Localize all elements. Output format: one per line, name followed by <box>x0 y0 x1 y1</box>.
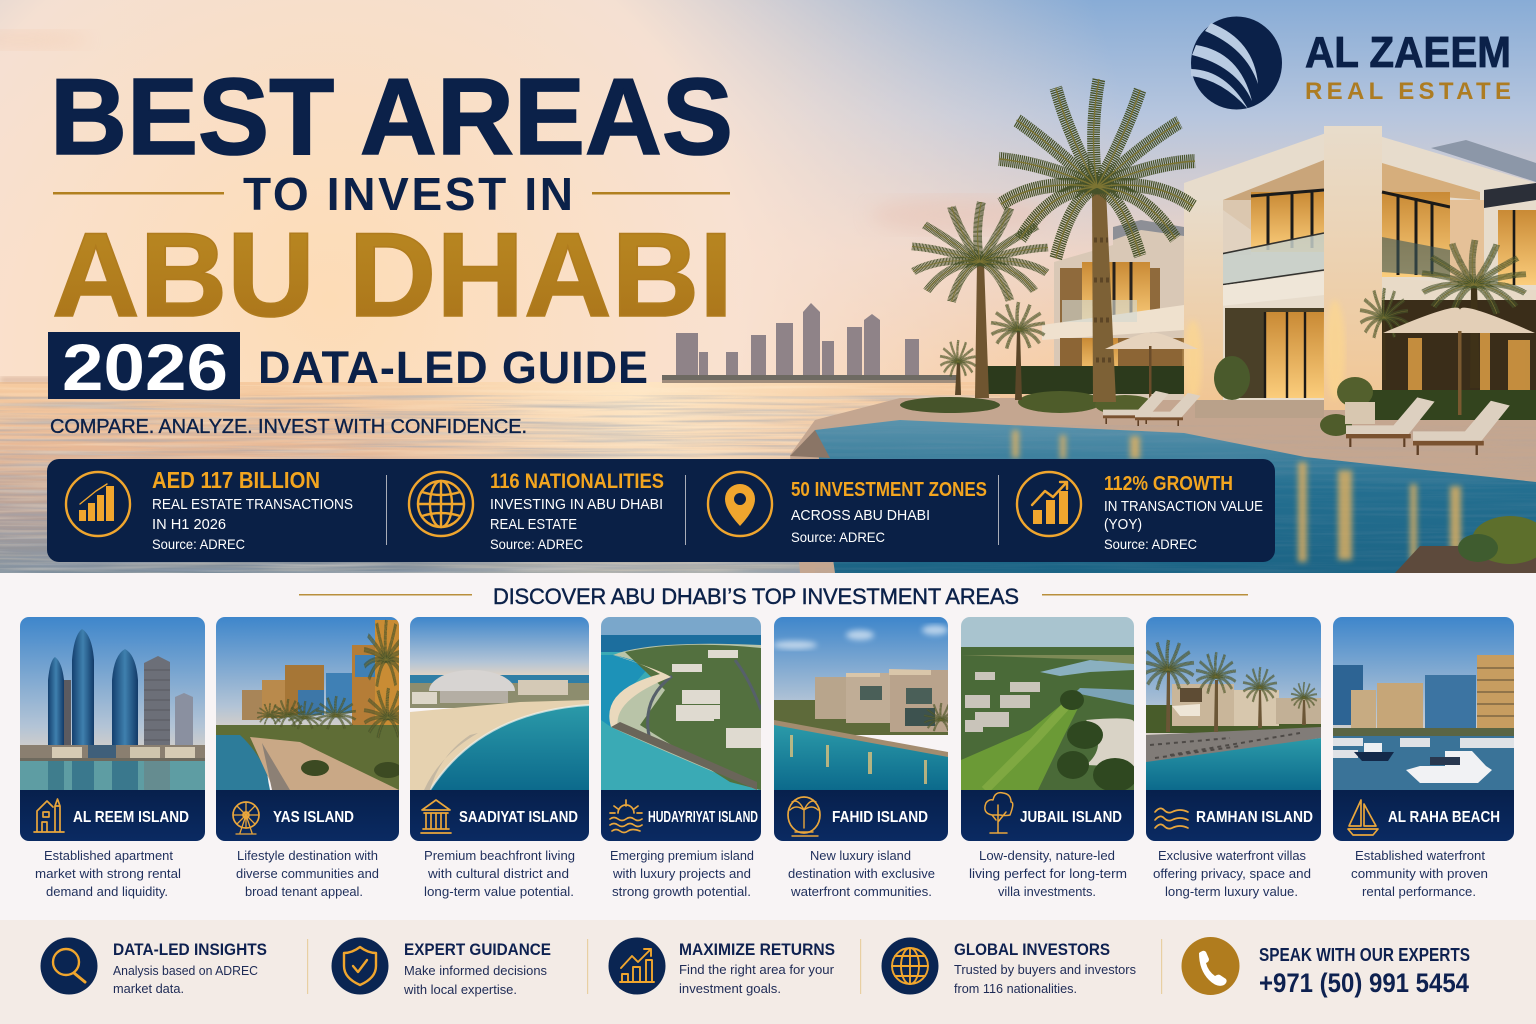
panel: key statistics <box>47 459 1275 562</box>
benefit: global investors: GLOBAL INVESTORS <box>954 940 1110 959</box>
card: Saadiyat Island <box>410 617 589 899</box>
icon: waves <box>1155 808 1188 829</box>
icon: magnifier <box>40 938 98 994</box>
title line: best areas: BEST AREAS <box>50 56 733 178</box>
card description: long-term luxury value. <box>1165 884 1298 899</box>
stat: AED 117 billion: AED 117 BILLION <box>152 467 320 493</box>
label bar <box>1333 790 1514 841</box>
icon: palm island <box>788 797 820 836</box>
card description: Established apartment <box>44 848 173 863</box>
contact call to action <box>1182 937 1470 998</box>
sea <box>0 376 1031 573</box>
photo: Saadiyat beach and dome <box>410 617 589 790</box>
benefit: global investors: from 116 nationalities. <box>954 981 1077 996</box>
card description: diverse communities and <box>236 866 379 881</box>
icon: growth chart <box>1017 472 1081 536</box>
title block <box>48 56 733 438</box>
title line: abu dhabi: ABU DHABI <box>52 208 733 342</box>
benefit: data-led insights: DATA-LED INSIGHTS <box>113 940 267 959</box>
card description: offering privacy, space and <box>1153 866 1311 881</box>
card description: Established waterfront <box>1355 848 1485 863</box>
card description: Lifestyle destination with <box>237 848 378 863</box>
icon: ferris wheel <box>233 802 259 834</box>
card description: with cultural district and <box>427 866 569 881</box>
card description: destination with exclusive <box>788 866 935 881</box>
benefit: expert guidance <box>332 938 551 997</box>
label bar <box>216 790 399 841</box>
card description <box>424 848 575 899</box>
year badge: 2026 <box>62 330 228 404</box>
icon: growth bars <box>608 938 666 994</box>
sky <box>0 0 1536 390</box>
card description: with luxury projects and <box>612 866 751 881</box>
benefit: maximize returns: investment goals. <box>679 981 781 996</box>
benefit: global investors: Trusted by buyers and investors <box>954 962 1136 977</box>
company name: AL ZAEEM <box>1305 28 1511 77</box>
photo: Al Reem towers <box>20 617 205 791</box>
card title: HUDAYRIYAT ISLAND <box>648 809 758 826</box>
stat: 50 investment zones: 50 INVESTMENT ZONES <box>791 479 987 501</box>
main villa <box>1184 126 1536 418</box>
benefit: data-led insights <box>40 938 267 996</box>
card description: Premium beachfront living <box>424 848 575 863</box>
card description: community with proven <box>1351 866 1488 881</box>
icon: rising bars <box>66 472 130 536</box>
icon: museum columns <box>421 800 451 833</box>
card title: AL REEM ISLAND <box>73 809 189 826</box>
footer band <box>0 920 1536 1024</box>
card title: AL RAHA BEACH <box>1388 809 1500 826</box>
card description: rental performance. <box>1362 884 1476 899</box>
card: Ramhan Island <box>1142 617 1321 899</box>
tagline: COMPARE. ANALYZE. INVEST WITH CONFIDENCE. <box>50 416 527 438</box>
card title: JUBAIL ISLAND <box>1020 809 1122 826</box>
card description: villa investments. <box>998 884 1096 899</box>
card description <box>236 848 379 899</box>
stat: 50 investment zones: Source: ADREC <box>791 529 885 545</box>
phone number: +971 (50) 991 5454 <box>1259 968 1469 998</box>
parasols <box>1105 308 1535 415</box>
label bar <box>601 790 761 841</box>
stat: AED 117 billion: REAL ESTATE TRANSACTIONS <box>152 496 353 513</box>
stat: 112% growth <box>1017 472 1263 552</box>
sun loungers <box>1103 391 1510 455</box>
logo mark <box>1191 16 1282 110</box>
contact heading: SPEAK WITH OUR EXPERTS <box>1259 945 1470 965</box>
stat: 116 nationalities: 116 NATIONALITIES <box>490 470 664 493</box>
card description: strong growth potential. <box>612 884 751 899</box>
card description <box>969 848 1127 899</box>
photo: Yas promenade <box>216 617 412 790</box>
section heading: DISCOVER ABU DHABI’S TOP INVESTMENT AREAS <box>493 584 1019 609</box>
title line: to invest in: TO INVEST IN <box>243 168 573 220</box>
card description: waterfront communities. <box>790 884 932 899</box>
stat: 112% growth: (YOY) <box>1104 517 1142 533</box>
hedges and planting <box>900 356 1536 436</box>
card description: living perfect for long-term <box>969 866 1127 881</box>
benefit: maximize returns <box>608 938 835 996</box>
stat: 116 nationalities: INVESTING IN ABU DHABI <box>490 496 663 513</box>
card title: FAHID ISLAND <box>832 809 928 826</box>
benefit: expert guidance: EXPERT GUIDANCE <box>404 940 551 959</box>
label bar <box>774 790 948 841</box>
card: Yas Island <box>216 617 412 899</box>
icon: globe <box>409 472 473 536</box>
photo: Fahid waterfront villas <box>773 617 958 790</box>
card description: New luxury island <box>810 848 911 863</box>
benefit: expert guidance: Make informed decisions <box>404 963 547 978</box>
card: Al Raha Beach <box>1333 617 1514 899</box>
card: Al Reem Island <box>20 617 205 899</box>
logo: Al Zaeem Real Estate <box>1191 16 1511 110</box>
card description <box>1153 848 1311 899</box>
benefit: maximize returns: Find the right area for your <box>679 962 835 977</box>
icon: tree <box>985 793 1013 833</box>
label bar <box>1146 790 1321 841</box>
card description: Low-density, nature-led <box>979 848 1115 863</box>
label bar <box>961 790 1134 841</box>
icon: house and tower <box>34 799 64 832</box>
benefit: global investors <box>882 938 1136 996</box>
card description: long-term value potential. <box>424 884 574 899</box>
card title: SAADIYAT ISLAND <box>459 809 578 826</box>
card description <box>35 848 181 899</box>
pool and deck <box>790 398 1536 573</box>
card title: YAS ISLAND <box>273 809 354 826</box>
icon: sailboat <box>1348 800 1378 835</box>
card description: Emerging premium island <box>610 848 754 863</box>
photo: Ramhan palms and rocks <box>1142 617 1321 790</box>
icon: globe <box>882 938 938 994</box>
icon: shield check <box>332 938 388 994</box>
benefit: data-led insights: Analysis based on ADREC <box>113 963 258 978</box>
stat: 50 investment zones <box>708 472 987 545</box>
stat: 50 investment zones: ACROSS ABU DHABI <box>791 507 930 524</box>
benefit: maximize returns: MAXIMIZE RETURNS <box>679 940 835 959</box>
label bar <box>20 790 205 841</box>
card description: broad tenant appeal. <box>245 884 363 899</box>
card: Fahid Island <box>773 617 958 899</box>
photo: Al Raha marina <box>1333 617 1514 790</box>
card description: market with strong rental <box>35 866 181 881</box>
palm trees <box>912 79 1526 402</box>
stat: 112% growth: 112% GROWTH <box>1104 473 1233 495</box>
icon: sun over water <box>610 800 642 832</box>
icon: map pin <box>708 472 772 536</box>
company tagline: REAL ESTATE <box>1305 78 1511 105</box>
stat: 116 nationalities: REAL ESTATE <box>490 516 577 533</box>
stat: 116 nationalities: Source: ADREC <box>490 536 583 552</box>
card description: Exclusive waterfront villas <box>1158 848 1306 863</box>
card description <box>788 848 935 899</box>
photo: Hudayriyat aerial coast <box>601 617 761 792</box>
stat: AED 117 billion: Source: ADREC <box>152 536 245 552</box>
skyline <box>662 303 957 383</box>
benefit: data-led insights: market data. <box>113 981 184 996</box>
subtitle: DATA-LED GUIDE <box>258 342 648 393</box>
label bar <box>410 790 589 841</box>
icon: phone <box>1182 937 1240 995</box>
stat: AED 117 billion: IN H1 2026 <box>152 516 226 533</box>
stat: AED 117 billion <box>66 467 353 552</box>
card: Hudayriyat Island <box>601 617 761 899</box>
stat: 116 nationalities <box>409 470 664 552</box>
card: Jubail Island <box>961 617 1137 899</box>
card description <box>610 848 754 899</box>
hero scene: sunset, sea, skyline and villas <box>0 0 1536 573</box>
card title: RAMHAN ISLAND <box>1196 809 1313 826</box>
benefit: expert guidance: with local expertise. <box>403 982 517 997</box>
card description <box>1351 848 1488 899</box>
photo: Jubail green aerial <box>961 617 1137 792</box>
stat: 112% growth: Source: ADREC <box>1104 536 1197 552</box>
card description: demand and liquidity. <box>46 884 168 899</box>
stat: 112% growth: IN TRANSACTION VALUE <box>1104 499 1263 515</box>
background villa <box>1042 220 1184 400</box>
